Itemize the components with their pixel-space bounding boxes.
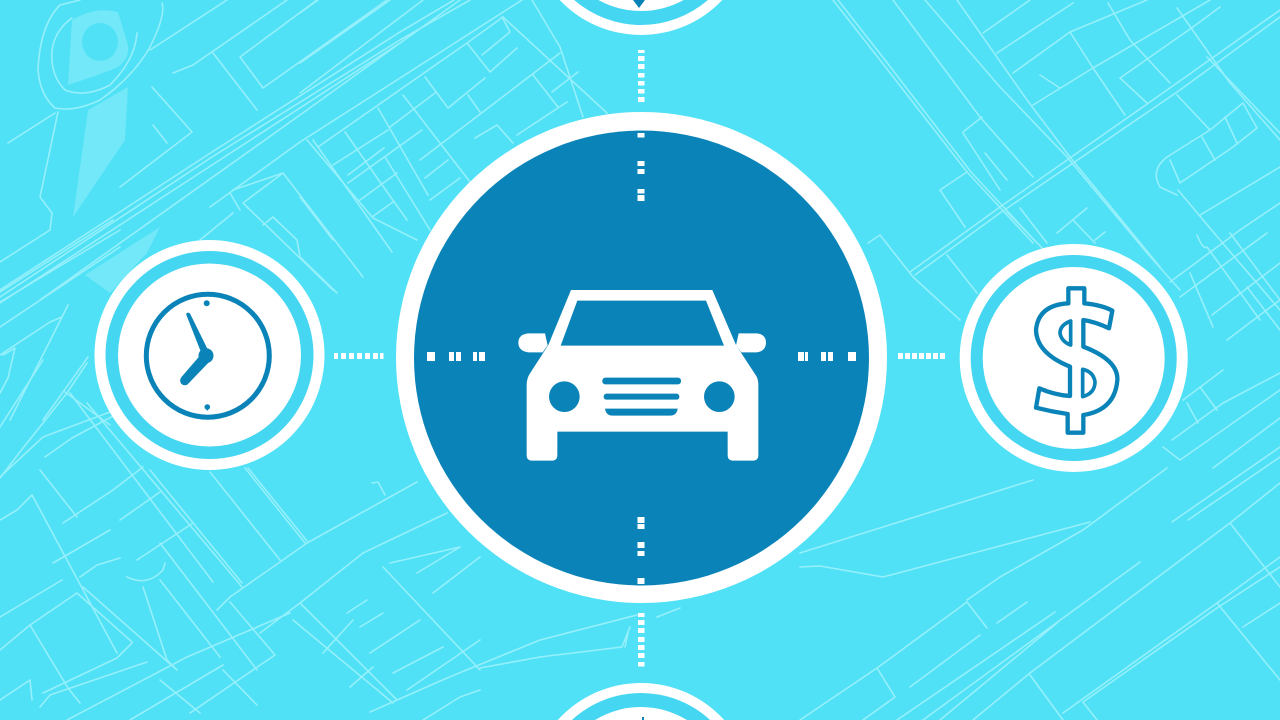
- bottom right: [800, 468, 1167, 600]
- top left: [38, 0, 163, 109]
- clock badge: [94, 240, 324, 470]
- icon: car front: [518, 290, 766, 461]
- dollar badge: [960, 244, 1188, 472]
- icon: clock: [146, 294, 269, 417]
- bottom badge, cropped by the frame: [558, 683, 724, 720]
- connector: bottom dashes: [638, 613, 644, 666]
- left middle: [0, 220, 120, 425]
- bottom centre: [370, 608, 680, 712]
- connector: left dashes: [334, 353, 384, 359]
- connector: right dashes: [898, 353, 945, 359]
- bottom left: [0, 360, 115, 478]
- icon: dollar sign: [1036, 288, 1117, 433]
- top right: [833, 0, 1180, 290]
- inner dashes: [427, 133, 856, 584]
- central car badge: [396, 112, 887, 603]
- top badge, cropped by the frame: [560, 0, 722, 35]
- connector: top dashes: [638, 50, 644, 102]
